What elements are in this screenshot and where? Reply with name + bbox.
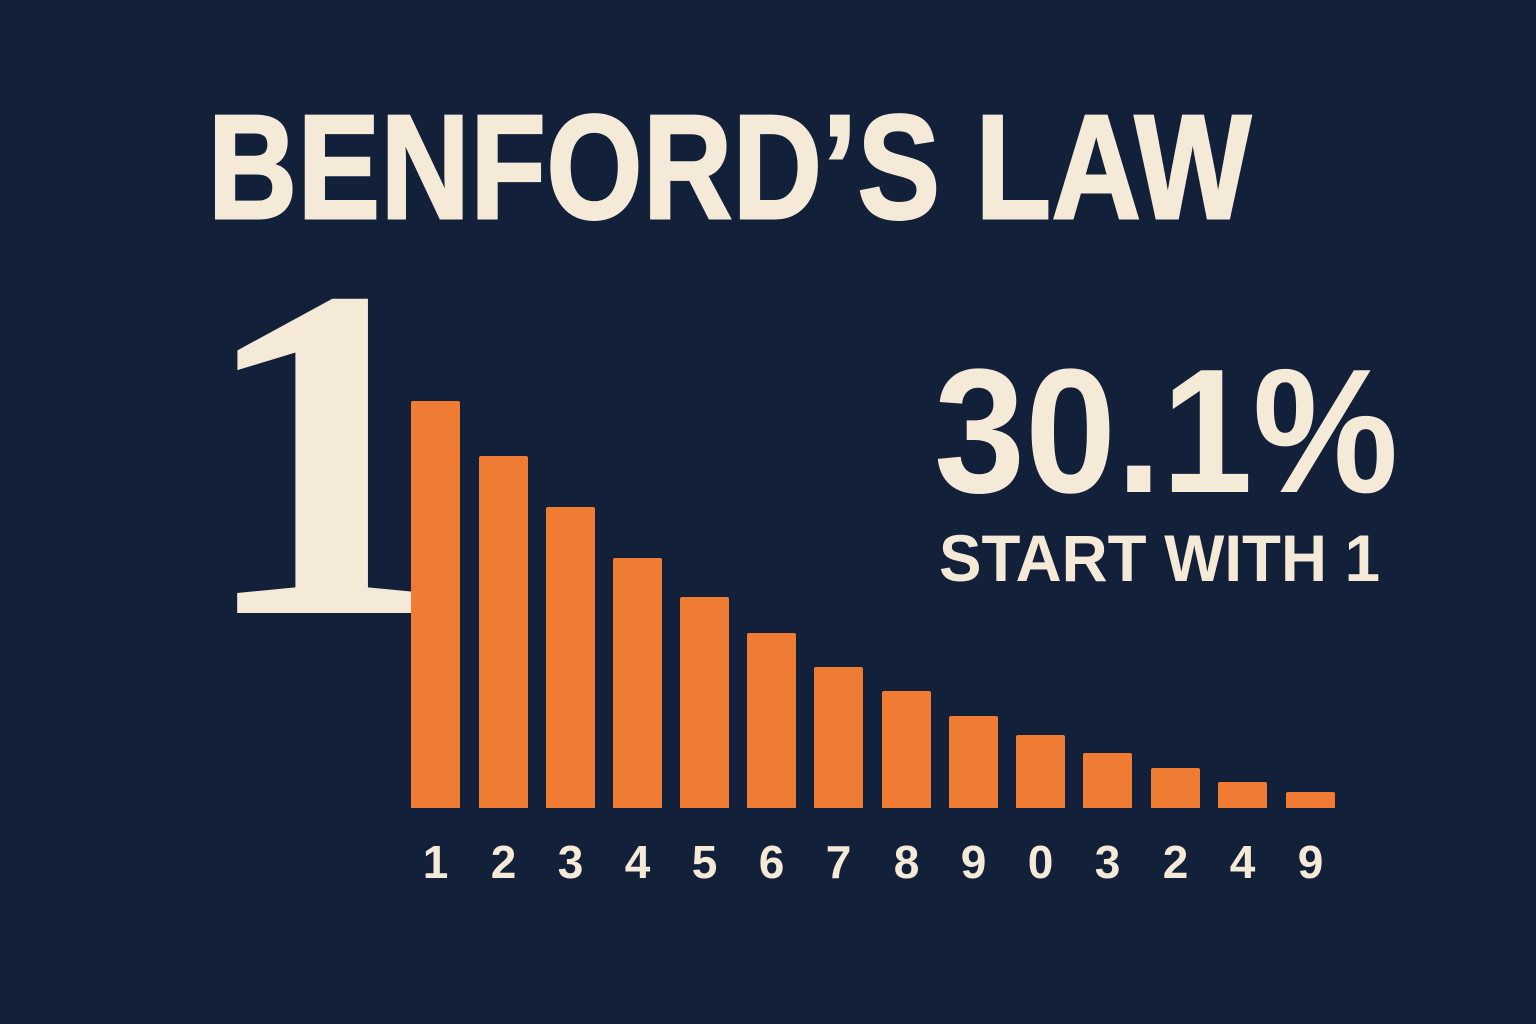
axis labels: 9 — [1298, 836, 1323, 888]
axis labels: 6 — [759, 836, 784, 888]
title: BENFORD’S LAW — [208, 85, 1252, 250]
axis labels: 7 — [826, 836, 851, 888]
axis labels: 2 — [491, 836, 516, 888]
axis labels: 9 — [961, 836, 986, 888]
axis labels: 1 — [423, 836, 448, 888]
stat: 30.1%: 30.1% — [934, 332, 1398, 530]
axis labels: 4 — [1230, 836, 1255, 888]
axis labels: 5 — [692, 836, 717, 888]
stat caption: START WITH 1 — [939, 521, 1380, 595]
axis labels: 8 — [894, 836, 919, 888]
big serif digit 1: 1 — [196, 189, 453, 716]
axis labels: 3 — [1095, 836, 1120, 888]
axis labels: 4 — [625, 836, 650, 888]
axis labels: 0 — [1028, 836, 1053, 888]
axis labels: 3 — [558, 836, 583, 888]
axis labels: 2 — [1163, 836, 1188, 888]
